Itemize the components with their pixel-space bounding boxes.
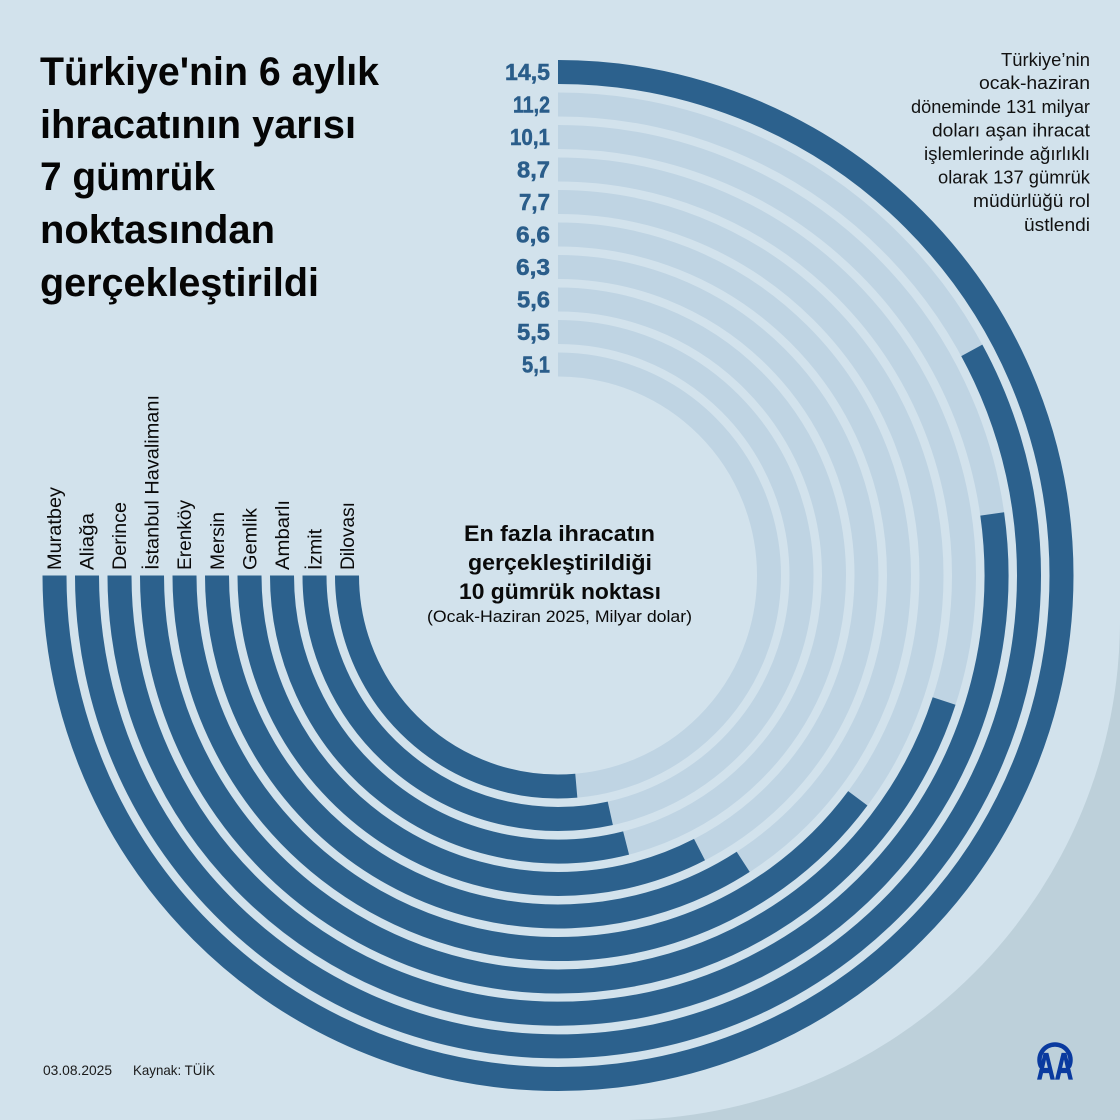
customs point labels: Gemlik xyxy=(240,508,262,570)
customs point labels: Aliağa xyxy=(76,513,98,570)
value labels: 5,5 xyxy=(517,319,550,345)
chart heading xyxy=(427,521,692,626)
ring: İzmit 5,5 xyxy=(314,332,802,819)
ring: Erenköy 7,7 xyxy=(184,202,932,949)
customs point labels: Erenköy xyxy=(174,500,196,570)
value labels: 7,7 xyxy=(519,189,550,215)
chart heading: gerçekleştirildiği xyxy=(468,550,652,575)
customs point labels: İzmit xyxy=(304,528,326,570)
value labels: 14,5 xyxy=(505,59,550,85)
intro text: doları aşan ihracat xyxy=(932,120,1090,140)
icon: AA logo xyxy=(1037,1044,1073,1087)
chart heading: En fazla ihracatın xyxy=(464,521,655,546)
intro text: Türkiye’nin xyxy=(1001,50,1090,70)
value labels: 6,6 xyxy=(516,222,550,248)
chart heading: 10 gümrük noktası xyxy=(459,579,661,604)
intro text: müdürlüğü rol xyxy=(973,191,1090,211)
title: 7 gümrük xyxy=(40,155,216,199)
intro text: ocak-haziran xyxy=(979,73,1090,93)
ring: Derince 10,1 xyxy=(120,137,997,1014)
title xyxy=(40,50,380,305)
value labels: 5,6 xyxy=(517,286,550,312)
value labels: 11,2 xyxy=(513,92,550,118)
ring: İstanbul Havalimanı 8,7 xyxy=(152,170,964,982)
ring: Aliağa 11,2 xyxy=(87,104,1029,1047)
value labels: 10,1 xyxy=(510,124,550,150)
value labels xyxy=(505,59,550,378)
customs point labels: İstanbul Havalimanı xyxy=(140,395,164,570)
ring: Mersin 6,6 xyxy=(217,234,899,916)
footer date and source: Kaynak: TÜİK xyxy=(133,1061,216,1078)
chart heading: (Ocak-Haziran 2025, Milyar dolar) xyxy=(427,607,692,626)
ring: Dilovası 5,1 xyxy=(347,364,769,786)
ring: Ambarlı 5,6 xyxy=(282,300,834,852)
intro text: üstlendi xyxy=(1024,215,1090,235)
footer date and source xyxy=(43,1061,216,1078)
value labels: 5,1 xyxy=(522,352,550,378)
title: noktasından xyxy=(40,208,275,252)
value labels: 6,3 xyxy=(516,254,550,280)
customs point labels: Ambarlı xyxy=(272,500,294,570)
icon: AA logo: AA xyxy=(1037,1046,1073,1087)
intro text: işlemlerinde ağırlıklı xyxy=(924,144,1090,164)
title: ihracatının yarısı xyxy=(40,103,356,147)
customs point labels: Derince xyxy=(109,502,131,570)
footer date and source: 03.08.2025 xyxy=(43,1062,112,1078)
value labels: 8,7 xyxy=(517,156,550,182)
customs point labels xyxy=(44,395,359,570)
ring: Gemlik 6,3 xyxy=(249,267,866,884)
intro text: döneminde 131 milyar xyxy=(911,97,1090,117)
intro text: olarak 137 gümrük xyxy=(938,168,1091,188)
customs point labels: Dilovası xyxy=(337,502,359,570)
customs point labels: Muratbey xyxy=(44,487,66,570)
title: Türkiye'nin 6 aylık xyxy=(40,50,380,94)
title: gerçekleştirildi xyxy=(40,261,319,305)
customs point labels: Mersin xyxy=(207,512,229,570)
intro text xyxy=(911,50,1091,235)
